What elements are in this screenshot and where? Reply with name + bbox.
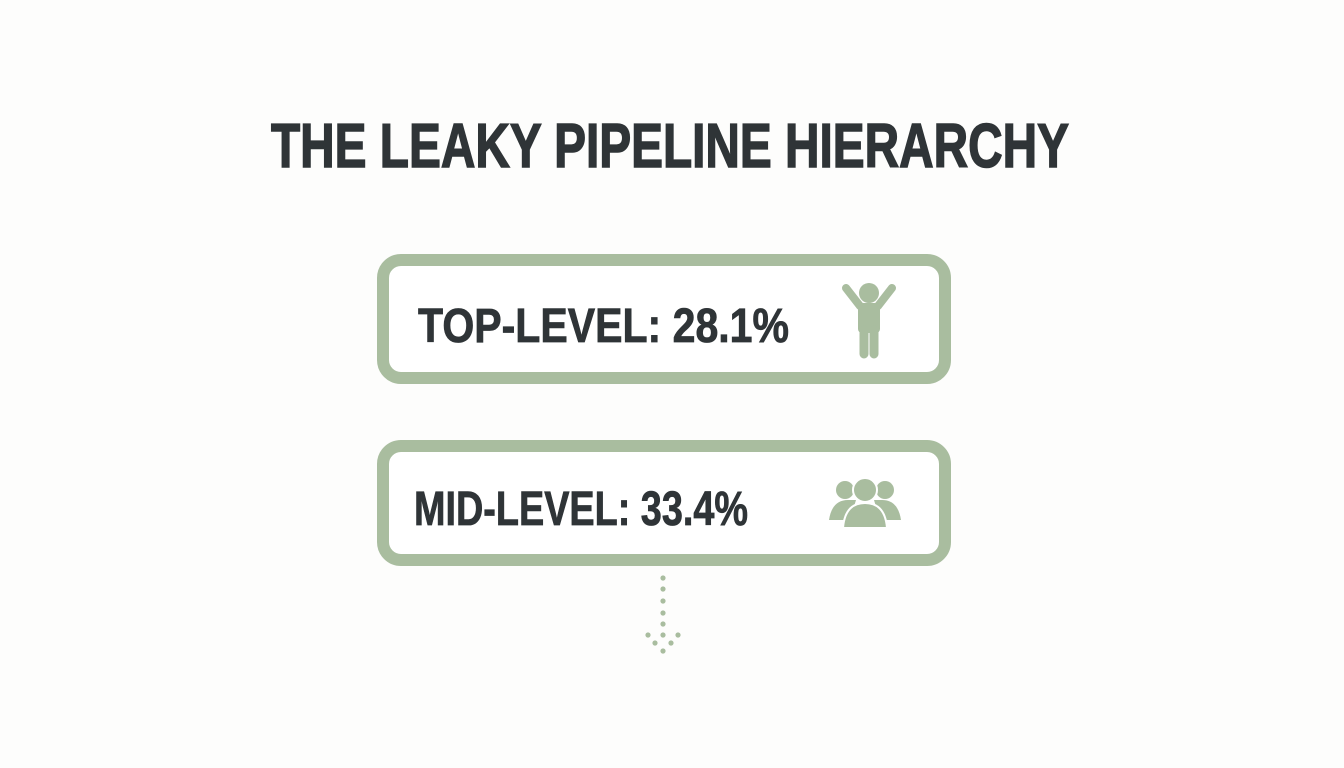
title: THE LEAKY PIPELINE HIERARCHY — [271, 112, 1069, 181]
text: mid-level value: MID-LEVEL: 33.4% — [414, 483, 748, 536]
text: top-level value: TOP-LEVEL: 28.1% — [418, 300, 789, 353]
icon: group of people — [829, 478, 901, 528]
panel: mid-level — [383, 446, 945, 560]
panel: top-level — [383, 260, 945, 378]
arrow: dotted down — [645, 575, 681, 654]
icon: person arms raised — [846, 283, 892, 354]
